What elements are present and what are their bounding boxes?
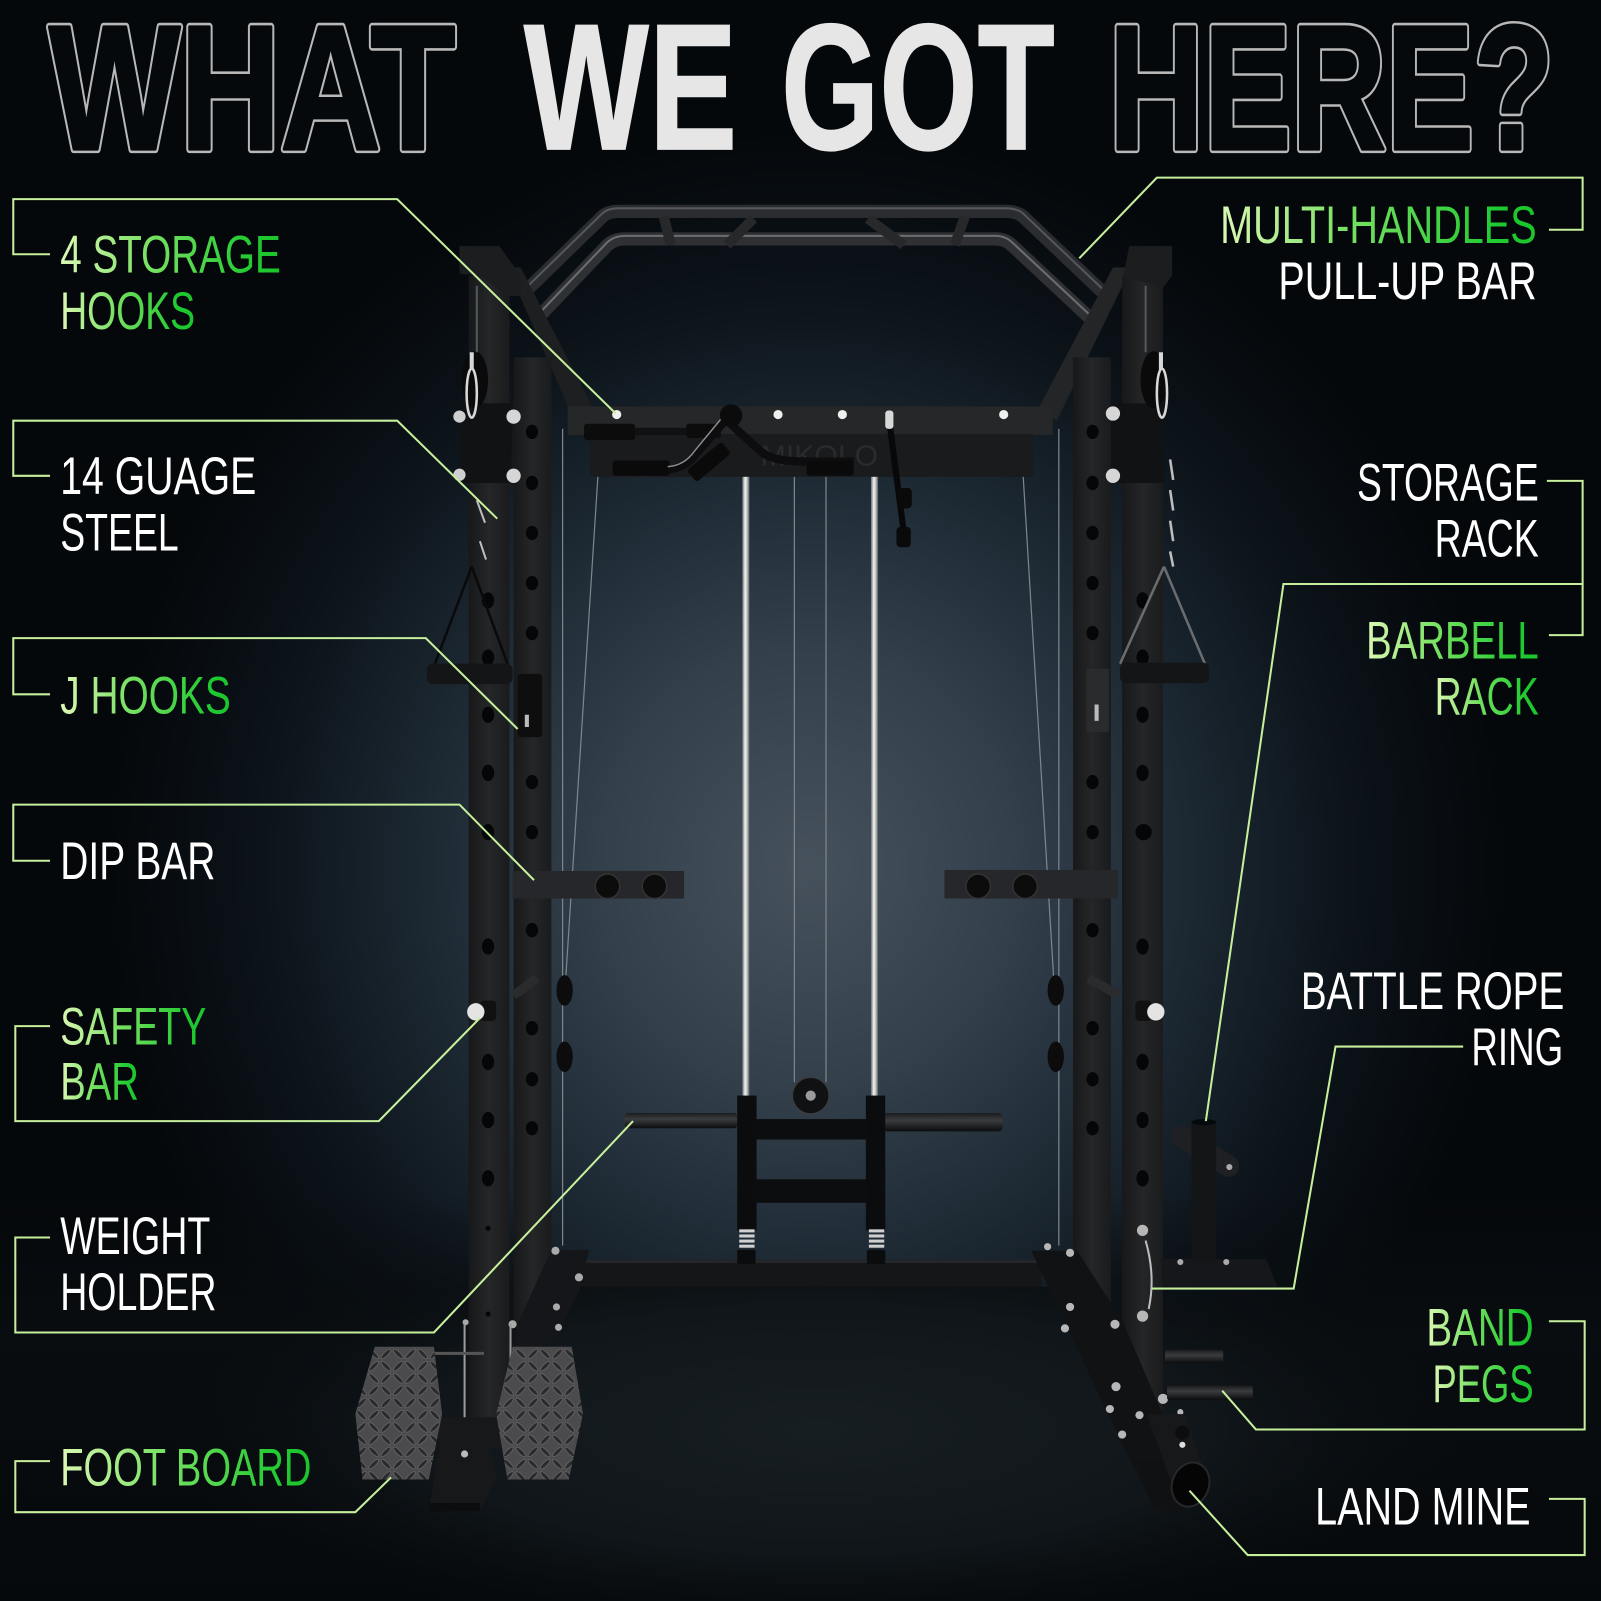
- label: storage rack: [1357, 453, 1539, 568]
- left inner post: [514, 357, 551, 1327]
- callout: foot board: [15, 1439, 391, 1512]
- top cross beam: [568, 406, 1053, 477]
- label text: [60, 998, 206, 1112]
- springs: [739, 1229, 884, 1248]
- left diagonal gusset: [507, 268, 594, 427]
- label text: 4 STORAGE: [60, 226, 281, 285]
- label text: [60, 1207, 216, 1322]
- callout: land mine: [1190, 1477, 1585, 1555]
- single cable handle: [885, 410, 912, 547]
- label: barbell rack: [1366, 612, 1539, 727]
- right front post: [1122, 246, 1172, 1409]
- left base bracket: [463, 1247, 589, 1419]
- barbell rack: [1162, 1119, 1277, 1287]
- label text: WEIGHT: [60, 1207, 210, 1266]
- label text: HOLDER: [60, 1263, 216, 1322]
- label text: J HOOKS: [60, 667, 231, 726]
- callout: weight holder: [15, 1121, 633, 1332]
- label text: RING: [1471, 1018, 1563, 1077]
- label: storage rack: RACK: [1435, 509, 1539, 568]
- callout: dip bar: [13, 805, 534, 891]
- right cable pulley assembly: [1106, 286, 1173, 567]
- right inner post: [1073, 357, 1111, 1327]
- foot board left plate: [355, 1347, 442, 1479]
- callout: multi-handles pull-up bar: [1079, 178, 1583, 311]
- left post holes: [482, 425, 538, 1317]
- callout: storage rack and barbell rack: [1206, 453, 1583, 1121]
- power rack illustration: [355, 208, 1277, 1512]
- title: [49, 0, 1554, 188]
- callout: safety bar: [15, 998, 480, 1121]
- right tricep handle: [1120, 567, 1209, 683]
- base beam: [577, 1260, 1041, 1287]
- small pulleys on side cables: [556, 975, 1064, 1072]
- label text: [1301, 962, 1564, 1077]
- guide rods: [742, 477, 878, 1098]
- cables: [563, 429, 1059, 1246]
- label text: HOOKS: [60, 282, 195, 341]
- land mine: [1136, 1414, 1215, 1512]
- left J hook: [518, 674, 542, 737]
- left cable pulley assembly: [453, 286, 521, 560]
- label text: LAND MINE: [1315, 1477, 1531, 1536]
- callout: J hooks: [13, 638, 518, 729]
- right diagonal gusset: [1037, 268, 1131, 421]
- label text: [60, 226, 281, 341]
- label text: [1220, 196, 1537, 311]
- band pegs: [1165, 1350, 1253, 1400]
- label: barbell rack: BARBELL: [1366, 612, 1539, 671]
- pulley: [792, 1077, 829, 1114]
- label text: FOOT BOARD: [60, 1439, 311, 1498]
- battle rope ring: [1146, 1241, 1152, 1309]
- label text: BAND: [1426, 1299, 1534, 1358]
- left dip bar: [513, 871, 684, 899]
- brand mark: MIKOLO: [761, 441, 878, 473]
- pull-up bar: [525, 208, 1107, 319]
- label text: BAR: [60, 1053, 139, 1112]
- foot board right plate: [496, 1347, 583, 1479]
- callout: 4 storage hooks: [13, 199, 616, 414]
- label text: STEEL: [60, 503, 179, 562]
- label text: SAFETY: [60, 998, 206, 1057]
- left tricep handle: [427, 567, 513, 684]
- right post holes: [1086, 425, 1152, 1186]
- label text: DIP BAR: [60, 832, 215, 891]
- right J hook: [1086, 669, 1109, 732]
- label: barbell rack: RACK: [1435, 668, 1539, 727]
- weight holder: [625, 1077, 1003, 1264]
- label text: PEGS: [1433, 1355, 1534, 1414]
- label text: [60, 447, 256, 562]
- right safety bar: [1088, 978, 1165, 1021]
- callout: band pegs: [1222, 1299, 1585, 1429]
- label text: 14 GUAGE: [60, 447, 256, 506]
- callout: battle rope ring: [1152, 962, 1564, 1289]
- callout: 14 guage steel: [13, 421, 497, 562]
- left front post: [459, 246, 521, 1419]
- lat pulldown bars: [584, 404, 854, 482]
- left safety bar: [467, 978, 537, 1021]
- right dip bar: [944, 870, 1118, 899]
- left foot board stand: [429, 1352, 502, 1511]
- label text: [1426, 1299, 1534, 1414]
- right base assembly: [1031, 1225, 1195, 1510]
